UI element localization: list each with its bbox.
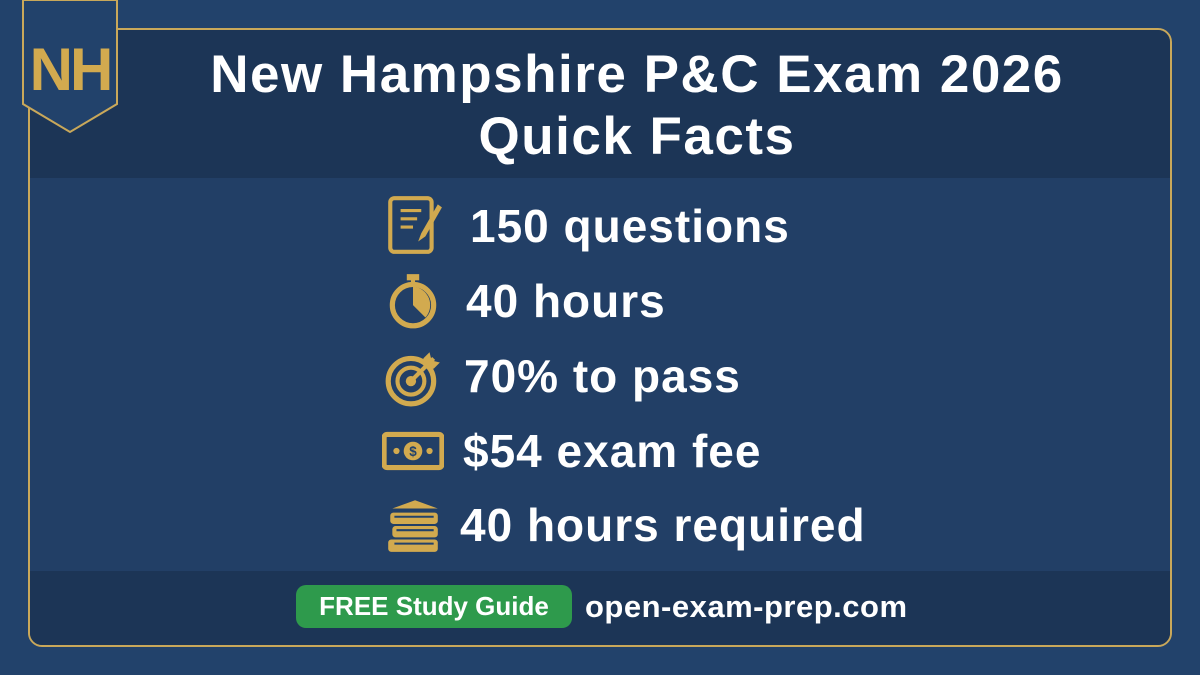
banner logo: NH: [30, 36, 110, 103]
header band: [30, 30, 1170, 178]
icon: money: $: [409, 444, 417, 459]
badge: [296, 585, 572, 628]
footer band: [30, 571, 1170, 645]
item 2: 40 hours: [466, 275, 666, 327]
banner logo: [22, 0, 118, 134]
title: [210, 45, 1064, 166]
item 5: 40 hours required: [460, 499, 866, 551]
icon: books: [388, 500, 438, 552]
icon: stopwatch: [390, 274, 436, 328]
url: open-exam-prep.com: [585, 589, 908, 624]
item 3: 70% to pass: [464, 350, 741, 402]
title: Quick Facts: [479, 107, 795, 166]
icon: target: [386, 352, 440, 406]
badge: FREE Study Guide: [319, 591, 549, 621]
item 4: $54 exam fee: [463, 425, 761, 477]
title: New Hampshire P&C Exam 2026: [210, 45, 1064, 104]
icon: notebook: [388, 196, 442, 254]
item 1: 150 questions: [470, 200, 790, 252]
footer: [296, 585, 908, 628]
icon: money: [382, 432, 444, 470]
